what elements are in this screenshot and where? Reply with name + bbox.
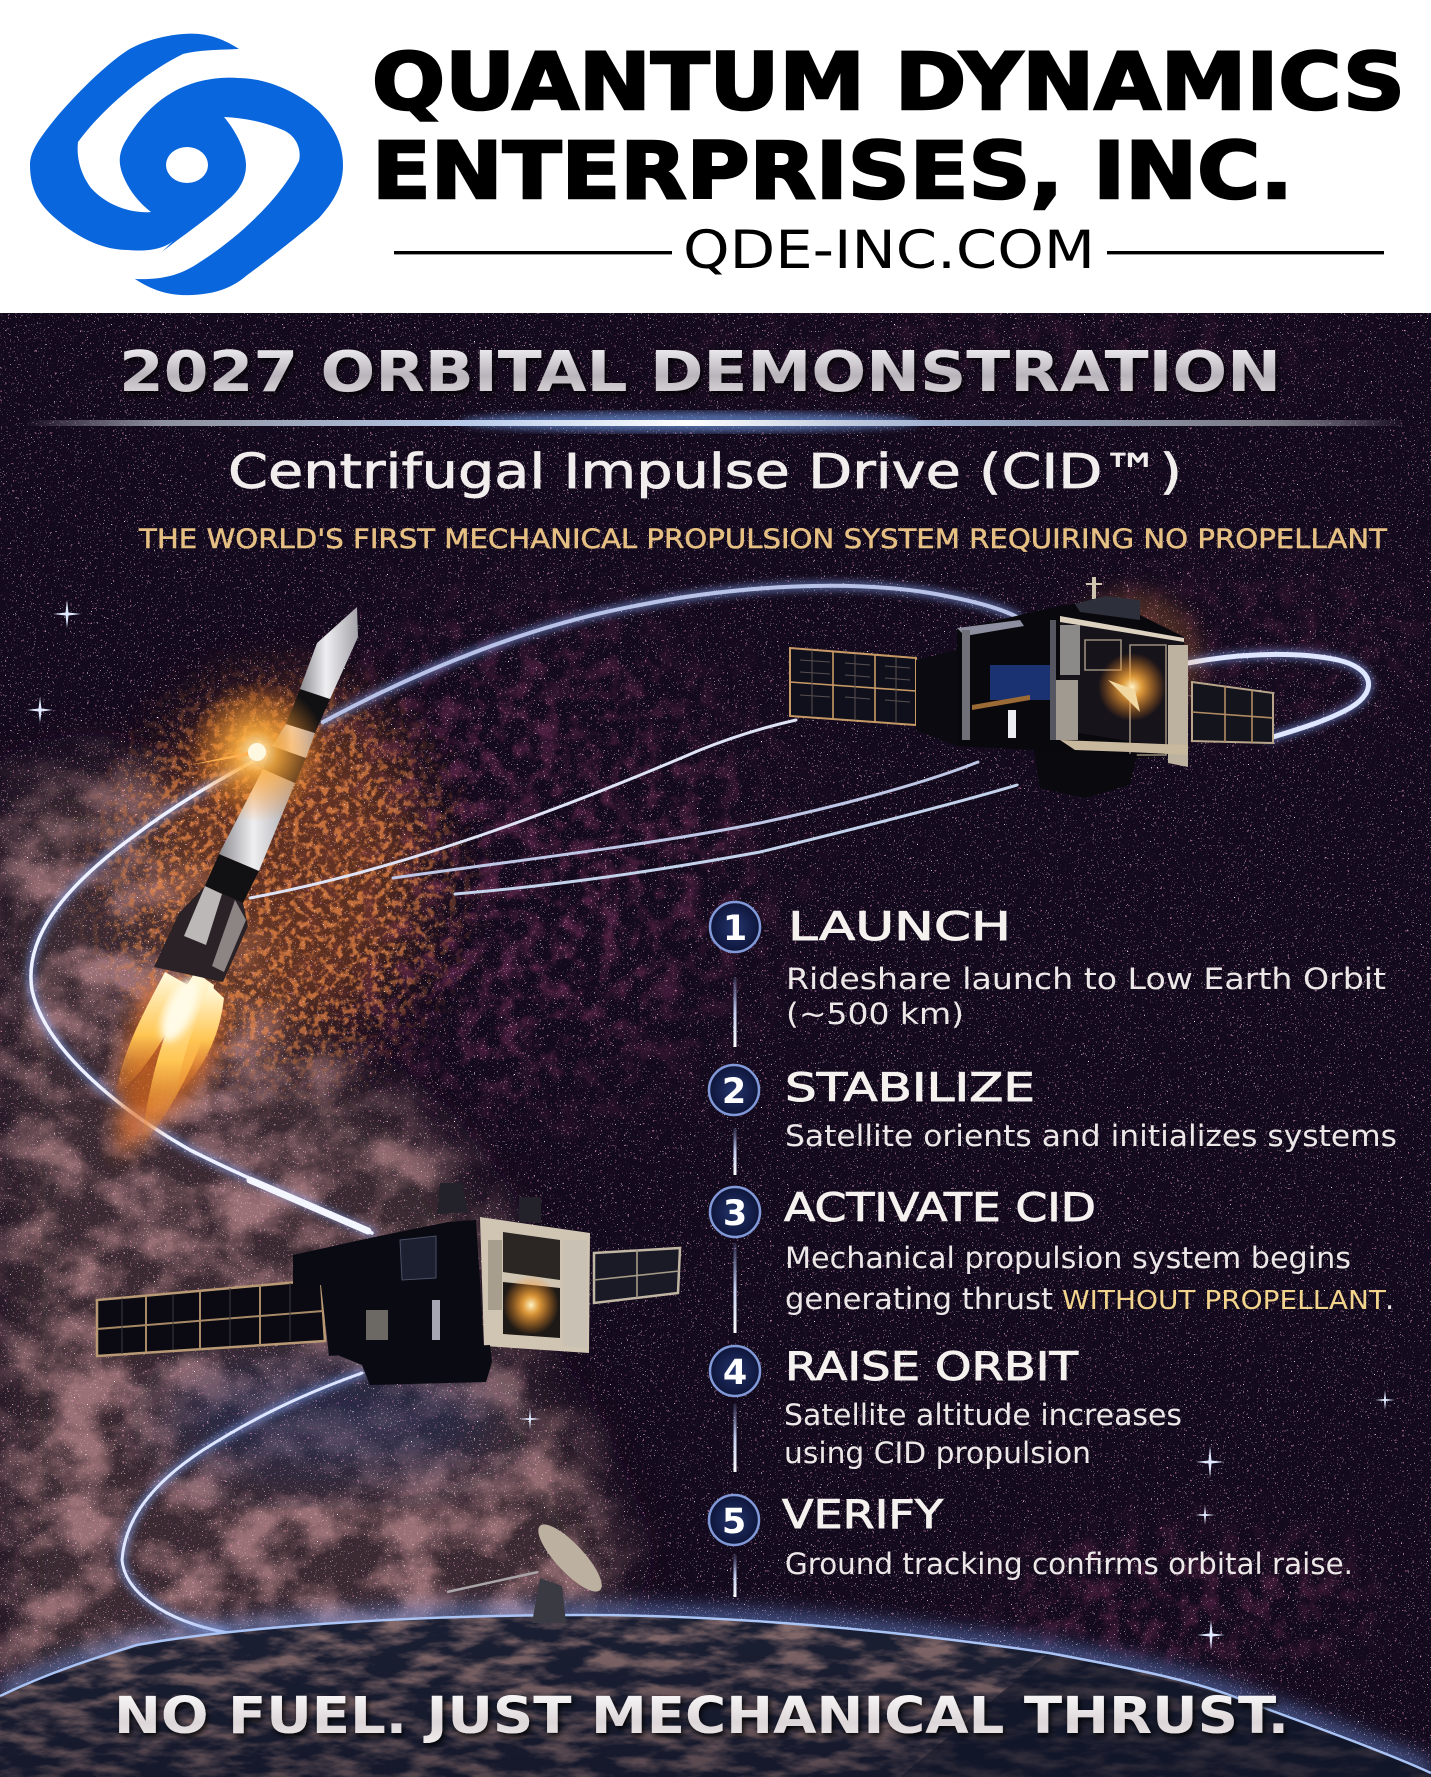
black band (286, 689, 330, 733)
orbit line a (250, 720, 796, 898)
right solar array (594, 1248, 680, 1303)
core glow (1098, 653, 1166, 721)
engine section (154, 886, 248, 982)
website with rules: QDE-INC.COM (683, 220, 1095, 281)
thruster glow (503, 1275, 559, 1335)
lower black band (205, 854, 259, 903)
orbit trajectories (31, 586, 1369, 1633)
nose cone (300, 607, 358, 699)
orange rocket haze (155, 690, 415, 1030)
step 2: stabilize: Satellite orients and initializes systems (785, 1119, 1397, 1153)
earth horizon (0, 1610, 1431, 1777)
roof module (1075, 596, 1140, 620)
silver ring (272, 724, 315, 758)
lower orbit arc (122, 1373, 362, 1633)
subtitle: Centrifugal Impulse Drive (CID™) (228, 444, 1182, 500)
cloud bank (0, 738, 648, 1692)
flare (187, 682, 327, 822)
step 4: raise orbit (710, 1345, 1182, 1472)
step 1: launch: Rideshare launch to Low Earth Orbit (786, 962, 1386, 996)
step 3: activate CID: generating thrust (785, 1282, 1053, 1316)
logo: blue spiral mark (30, 34, 343, 295)
company name (372, 38, 1405, 217)
planet surface (0, 1610, 1431, 1777)
step 1: launch (710, 902, 1386, 1047)
nebula haze (283, 313, 1422, 1680)
upper satellite (790, 577, 1273, 798)
rocket (115, 607, 358, 1160)
main silver stage (219, 769, 295, 871)
orbit line c (455, 785, 1017, 894)
orbit ring around satellite (1188, 654, 1369, 738)
website with rules (394, 220, 1384, 281)
dark module (293, 1220, 484, 1356)
upper black band (263, 746, 306, 783)
underside frame (330, 1345, 492, 1385)
orbit line b (393, 762, 978, 878)
exhaust stacks (437, 1183, 541, 1223)
step 5: verify: Ground tracking confirms orbital raise. (785, 1547, 1353, 1581)
step 5: verify: VERIFY (782, 1493, 943, 1538)
tagline: THE WORLD'S FIRST MECHANICAL PROPULSION SYSTEM REQUIRING NO PROPELLANT (138, 524, 1388, 555)
light equipment bay (480, 1217, 590, 1353)
underside equipment (1034, 750, 1137, 798)
orbit glow (31, 586, 1369, 1633)
atmosphere glow (0, 1615, 1431, 1773)
upper orbit arc (323, 586, 1017, 722)
cloud underlayer (0, 770, 620, 1700)
header banner (0, 0, 1431, 313)
step 3: activate CID: . (1385, 1282, 1394, 1316)
step 1: launch: 1 (723, 909, 747, 949)
step 4: raise orbit: using CID propulsion (784, 1436, 1091, 1470)
ground dish antenna (447, 1516, 610, 1623)
lower satellite (97, 1183, 680, 1385)
step 3: activate CID: ACTIVATE CID (784, 1186, 1096, 1231)
step 3: activate CID: 3 (723, 1194, 747, 1234)
step 4: raise orbit: 4 (723, 1353, 747, 1393)
main launch arc (31, 762, 372, 1233)
step 4: raise orbit: Satellite altitude increases (784, 1398, 1182, 1432)
step 2: stabilize: 2 (722, 1072, 746, 1112)
step 1: launch: LAUNCH (788, 905, 1011, 950)
beam into lower satellite (250, 1180, 368, 1231)
step 3: activate CID: Mechanical propulsion system begins (785, 1241, 1351, 1275)
back glow (1062, 590, 1202, 730)
divider glow line (25, 412, 1405, 432)
horizon line (0, 1615, 1431, 1773)
antenna mast (1086, 577, 1102, 599)
left solar array (790, 648, 916, 725)
blue dusk patch (160, 1365, 500, 1475)
bright stars (27, 600, 1395, 1650)
orange rocket speckles (72, 650, 492, 1110)
company name: ENTERPRISES, INC. (372, 127, 1293, 217)
step 1: launch: (~500 km) (786, 997, 964, 1031)
step 3: activate CID: WITHOUT PROPELLANT (1062, 1286, 1386, 1316)
mission steps (709, 902, 1397, 1597)
step 5: verify (709, 1493, 1353, 1597)
engine flames (115, 972, 225, 1160)
satellite body (916, 600, 1188, 767)
step 3: activate CID (710, 1186, 1394, 1333)
step 2: stabilize: STABILIZE (785, 1066, 1035, 1111)
company name: QUANTUM DYNAMICS (372, 38, 1405, 128)
step 5: verify: 5 (722, 1502, 746, 1542)
step 4: raise orbit: RAISE ORBIT (785, 1345, 1078, 1390)
left solar array (97, 1280, 325, 1356)
step 2: stabilize (709, 1065, 1397, 1175)
right solar array (1192, 682, 1273, 743)
title: 2027 ORBITAL DEMONSTRATION (119, 340, 1281, 405)
closing slogan: NO FUEL. JUST MECHANICAL THRUST. (114, 1687, 1289, 1746)
